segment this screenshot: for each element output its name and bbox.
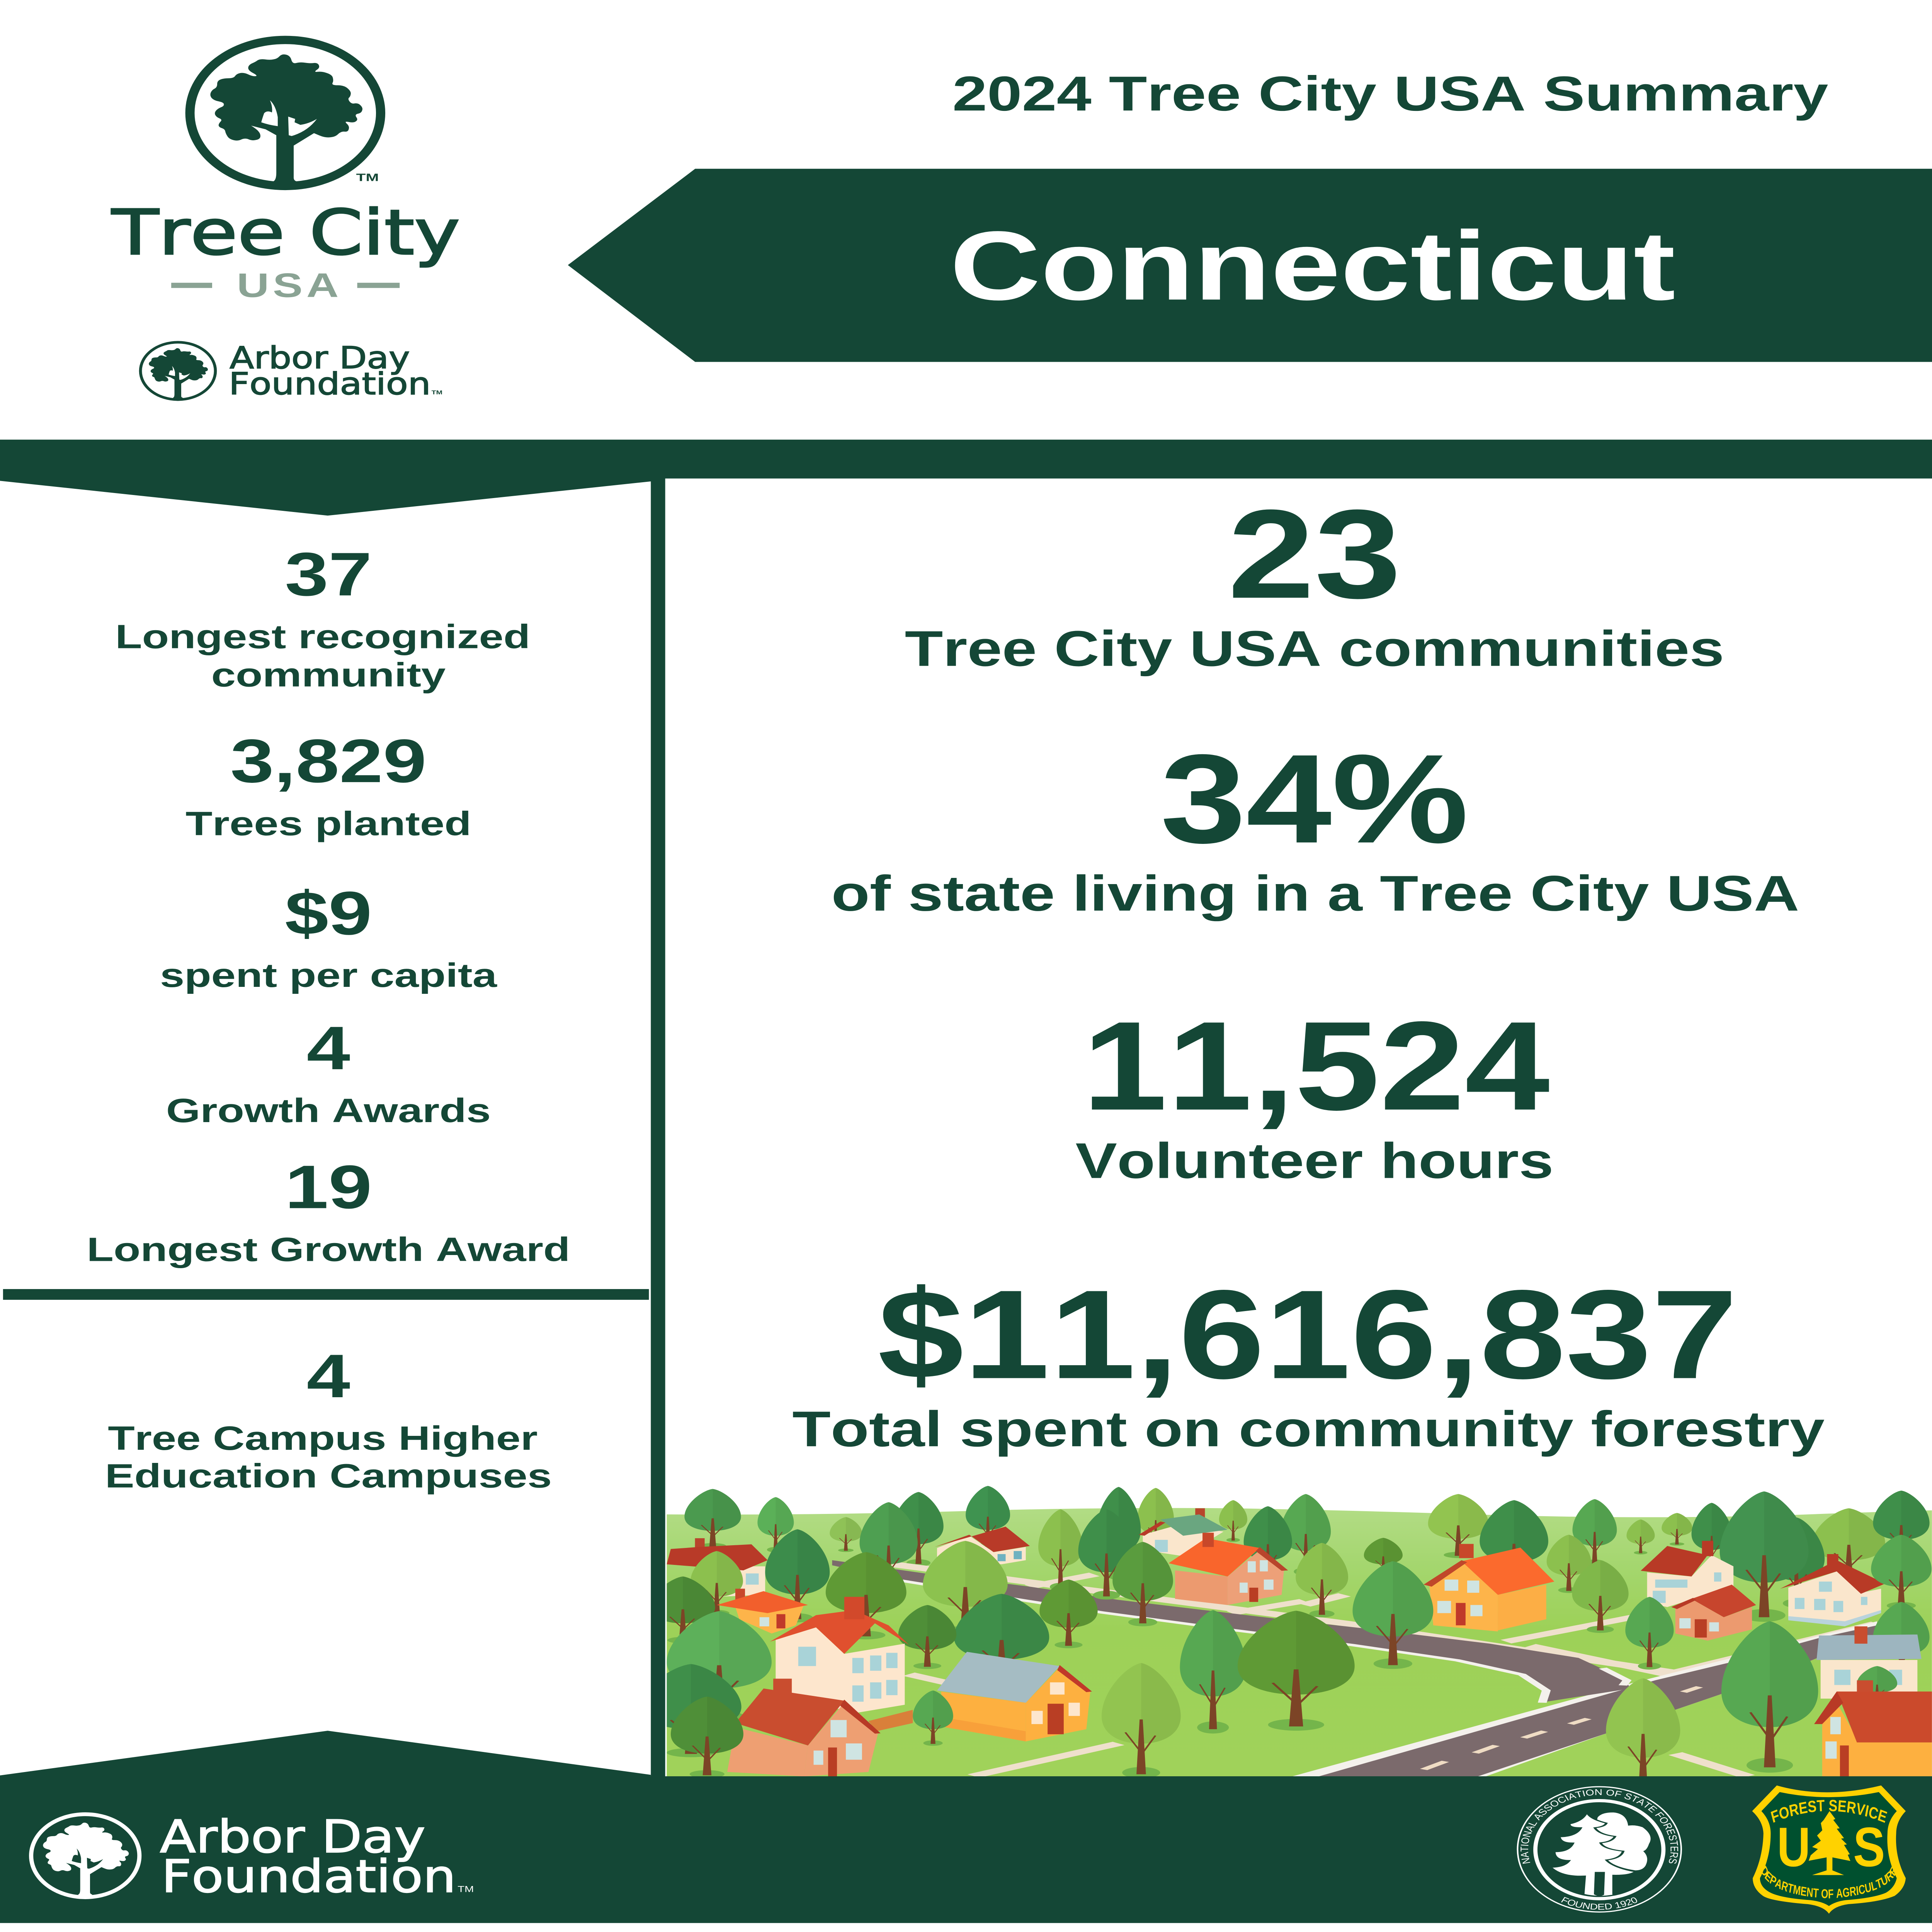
banner arrow: state name [568,169,1932,362]
house: bottom-right red roof yellow [1814,1680,1932,1776]
stat: total spent [792,1264,1825,1457]
house: green roof [1139,1508,1228,1556]
shield letter U: U [1777,1816,1810,1878]
stat: longest recognized community [115,540,530,694]
house: bottom-left red roof peach [727,1679,881,1776]
seal text top: NATIONAL ASSOCIATION OF STATE FORESTERS [1519,1787,1680,1865]
panel: left column stats [3,540,649,1495]
logo: Arbor Day Foundation (header) [141,341,442,402]
icon: small tree in circle [141,342,215,400]
stat: longest growth award: 19 [285,1153,372,1221]
logo wordmark: Tree City [111,197,460,269]
illustration: neighborhood with houses, trees and road [641,1486,1932,1792]
shield curved text: top: FOREST SERVICE [1769,1796,1889,1827]
stat: trees planted: Trees planted [185,805,471,842]
stat: tree campus [105,1342,552,1495]
column divider [651,478,665,1778]
road and sidewalks [832,1560,1877,1776]
stat: spent per capita: $9 [285,879,372,948]
house: far-left red roof [667,1538,768,1597]
stat: growth awards: Growth Awards [166,1092,491,1129]
house: blue roof yellow walls [937,1652,1092,1742]
icon: tree in circle [190,40,381,187]
stat: communities [905,483,1724,677]
stat: total spent: Total spent on community forestry [792,1401,1825,1457]
stat: communities: Tree City USA communities [905,621,1724,677]
stat: tree campus: Education Campuses [105,1457,552,1495]
logo: Arbor Day Foundation (footer) [31,1810,474,1903]
house: small orange-yellow left [717,1589,808,1633]
panel: right column headline stats [792,483,1825,1457]
trademark: TM [356,171,379,183]
stat: volunteer hours: 11,524 [1082,995,1551,1136]
title: 2024 Tree City USA Summary [952,66,1828,121]
state name: Connecticut [950,211,1675,320]
house: back red roof [935,1527,1030,1564]
stat: spent per capita [160,879,497,994]
stat: tree campus: 4 [307,1342,350,1410]
house: right cream with blue base [1780,1554,1885,1626]
logo USA subtitle: USA [237,266,338,304]
logo: Arbor Day Foundation (footer): TM [457,1884,474,1894]
house: right grey roof [1816,1626,1922,1699]
footer band [0,1731,1932,1923]
logo: National Association of State Foresters seal [1517,1787,1681,1912]
stat: volunteer hours: Volunteer hours [1075,1133,1554,1189]
stat: percent of state [831,728,1799,922]
house: tall red roof cream [1641,1541,1733,1607]
stat: percent of state: 34% [1160,728,1469,869]
seal trees [1551,1811,1651,1896]
stat: tree campus: Tree Campus Higher [108,1420,537,1457]
stat: total spent: $11,616,837 [878,1264,1738,1405]
house: small peach [1671,1585,1756,1641]
logo: Tree City USA [111,40,460,304]
stat: longest recognized community: Longest recognized [115,618,530,655]
stat: trees planted: 3,829 [230,727,427,796]
stat: trees planted [185,727,471,842]
logo: Arbor Day Foundation (header): Foundation [229,367,431,402]
divider [3,1289,649,1300]
house: yellow walls orange roof [1423,1544,1554,1631]
logo: Arbor Day Foundation (header): TM [432,389,442,396]
wordmark: Arbor Day [230,341,410,376]
logo: US Forest Service shield [1752,1786,1906,1914]
logo: Arbor Day Foundation (footer): Foundation [162,1850,456,1903]
wordmark: Arbor Day [160,1810,425,1863]
stat: longest recognized community: 37 [285,540,372,609]
house: orange roof peach walls [1168,1533,1288,1605]
icon: white tree in circle [31,1814,139,1898]
seal text bottom: FOUNDED 1920 [1559,1895,1640,1912]
shield curved text: bottom: DEPARTMENT OF AGRICULTURE [1759,1864,1900,1901]
stat: growth awards: 4 [307,1014,350,1083]
logo USA subtitle [171,266,400,304]
header band with pennant [0,440,1932,515]
stat: longest growth award: Longest Growth Award [87,1231,570,1268]
stat: communities: 23 [1228,483,1401,624]
stat: spent per capita: spent per capita [160,957,497,994]
stat: growth awards [166,1014,491,1129]
stat: volunteer hours [1075,995,1554,1189]
stat: percent of state: of state living in a Tree City USA [831,866,1799,922]
stat: longest recognized community: community [211,656,446,694]
stat: longest growth award [87,1153,570,1268]
shield letter S: S [1853,1816,1885,1878]
house: large cream red roof [770,1597,913,1731]
